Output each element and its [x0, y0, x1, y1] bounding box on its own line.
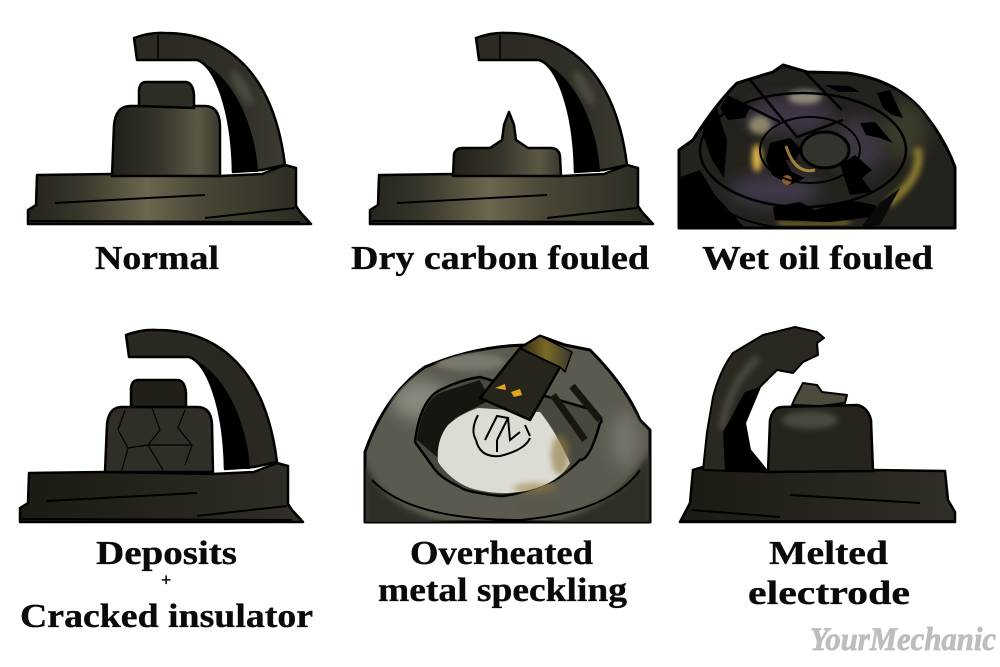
- label: metal speckling: metal speckling: [378, 572, 627, 609]
- panel: dry carbon fouled plug: [370, 33, 653, 224]
- label: electrode: electrode: [748, 575, 910, 612]
- insulator: [768, 405, 873, 472]
- label: Cracked insulator: Cracked insulator: [20, 598, 313, 635]
- center cone: [801, 132, 849, 168]
- ground strap: [480, 348, 560, 420]
- label: Deposits: Deposits: [96, 535, 237, 572]
- electrode shadow: [197, 60, 258, 172]
- black oil patches: [680, 170, 745, 228]
- base: [20, 463, 303, 522]
- oil stains and swirl: [680, 70, 927, 228]
- center electrode: [473, 415, 530, 456]
- base: [28, 165, 311, 224]
- panel: wet oil fouled plug: [679, 65, 955, 228]
- electrode shadow: [539, 60, 600, 172]
- strap shoulder: [520, 336, 572, 372]
- panel: melted electrode plug: [680, 327, 955, 522]
- strap arm shadow: [553, 386, 600, 440]
- base: [680, 467, 955, 522]
- worn insulator: [453, 112, 561, 176]
- well dark left side: [417, 380, 490, 458]
- base crease lines: [22, 493, 292, 520]
- yellow scorch on insulator: [551, 435, 569, 475]
- melted debris: [792, 383, 847, 406]
- label: Melted: Melted: [769, 535, 888, 572]
- cap with deposits: [131, 380, 186, 407]
- recessed well: [415, 377, 601, 496]
- label: plus sign: +: [161, 570, 171, 590]
- base crease lines: [372, 195, 642, 222]
- base: [370, 165, 653, 224]
- electrode highlight: [569, 68, 599, 108]
- panel: deposits and cracked insulator plug: [20, 330, 303, 522]
- white insulator: [438, 408, 570, 493]
- ground electrode: [126, 330, 277, 469]
- panel: overheated plug: [365, 336, 650, 530]
- electrode highlight: [722, 358, 758, 430]
- base crease lines: [682, 495, 955, 521]
- ground electrode: [476, 33, 627, 172]
- insulator: [112, 106, 220, 176]
- crack lines: [118, 408, 192, 470]
- panel: normal plug: [28, 33, 311, 224]
- orange spot: [782, 175, 792, 185]
- swirl rings: [700, 93, 906, 207]
- electrode shadow: [189, 357, 250, 469]
- label: Wet oil fouled: Wet oil fouled: [702, 240, 933, 277]
- glowing specks: [495, 384, 522, 397]
- electrode strap outline: [735, 70, 843, 137]
- shading and rim: [365, 353, 650, 530]
- plug silhouette: [679, 65, 955, 228]
- electrode tip line: [157, 35, 159, 60]
- label: Dry carbon fouled: Dry carbon fouled: [351, 240, 649, 277]
- label: Overheated: Overheated: [410, 535, 593, 572]
- electrode shadow: [723, 387, 768, 472]
- electrode highlight: [227, 68, 257, 108]
- base crease lines: [30, 195, 300, 222]
- ground electrode: [134, 33, 285, 172]
- label: Normal: Normal: [95, 240, 219, 277]
- melted ground electrode: [703, 327, 824, 472]
- electrode tip line: [499, 35, 501, 60]
- plug silhouette: [365, 336, 650, 522]
- insulator: [105, 407, 213, 472]
- center electrode cap: [139, 82, 194, 108]
